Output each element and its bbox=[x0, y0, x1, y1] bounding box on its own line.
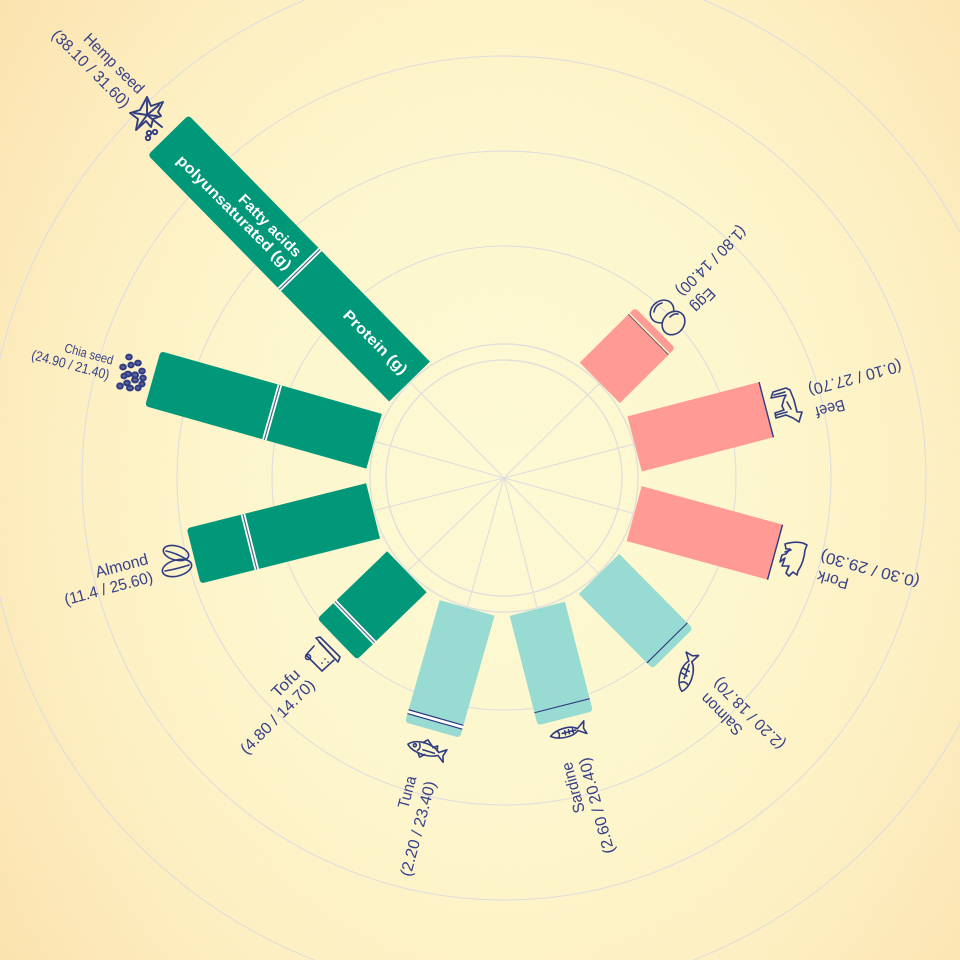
label: Chia seed: (24.90 / 21.40) bbox=[30, 346, 111, 383]
bar: Pork bbox=[627, 486, 783, 580]
bar: Egg bbox=[580, 308, 675, 403]
label: Sardine: Sardine bbox=[559, 760, 589, 815]
label: Beef: (0.10 / 27.70) bbox=[806, 357, 903, 398]
label: Sardine bbox=[559, 755, 618, 860]
bar: Beef bbox=[627, 382, 773, 472]
legend labels inside hemp bar bbox=[173, 141, 416, 384]
label: Chia seed: Chia seed bbox=[63, 340, 115, 368]
label: Pork: (0.30 / 29.30) bbox=[819, 547, 922, 590]
label: Almond bbox=[58, 551, 155, 609]
bar: Salmon bbox=[579, 554, 693, 669]
icon: almonds bbox=[160, 543, 194, 580]
label: Salmon: (2.20 / 18.70) bbox=[710, 674, 789, 752]
label: Egg: (1.80 / 14.00) bbox=[672, 222, 749, 299]
label: Tuna: (2.20 / 23.40) bbox=[398, 779, 440, 878]
label: Almond: (11.4 / 25.60) bbox=[63, 569, 155, 609]
bar: Chia seed bbox=[145, 351, 382, 469]
legend labels inside hemp bar: Fatty acids bbox=[235, 191, 305, 261]
label: Salmon: Salmon bbox=[698, 689, 747, 738]
label: Tofu: Tofu bbox=[269, 666, 304, 701]
icon: chia seeds bbox=[117, 355, 146, 390]
label: Hemp seed: (38.10 / 31.60) bbox=[48, 27, 133, 112]
bar: Hemp seed bbox=[148, 115, 430, 401]
icon: salmon fish bbox=[676, 652, 699, 693]
label: Egg bbox=[672, 222, 765, 315]
label: Sardine: (2.60 / 20.40) bbox=[576, 755, 618, 855]
icon: tofu pot bbox=[306, 637, 340, 671]
label: Almond: Almond bbox=[94, 551, 150, 582]
label: Tuna bbox=[379, 774, 440, 878]
radial bar chart bbox=[145, 115, 783, 738]
icon: tuna fish bbox=[405, 735, 448, 764]
label: Beef: Beef bbox=[813, 396, 847, 420]
label: Pork bbox=[813, 547, 922, 609]
legend labels inside hemp bar: polyunsaturated (g) bbox=[173, 152, 295, 274]
label: Egg: Egg bbox=[687, 284, 718, 315]
legend labels inside hemp bar: Protein (g) bbox=[339, 307, 411, 378]
icon: pig bbox=[780, 542, 807, 576]
label: Beef bbox=[806, 357, 909, 420]
label: Tuna: Tuna bbox=[395, 774, 420, 810]
label: Chia seed bbox=[30, 332, 115, 383]
bar: Almond bbox=[187, 483, 380, 584]
bar: Tofu bbox=[317, 551, 427, 660]
label: Hemp seed: Hemp seed bbox=[80, 30, 147, 98]
icon: eggs bbox=[646, 295, 690, 339]
label: Pork: Pork bbox=[814, 567, 851, 591]
label: Tofu: (4.80 / 14.70) bbox=[237, 677, 319, 758]
bar: Tuna bbox=[405, 600, 495, 738]
icon: sardine fish bbox=[549, 721, 587, 742]
icon: hemp leaf bbox=[130, 97, 163, 140]
bar: Sardine bbox=[510, 602, 593, 725]
icon: cow bbox=[771, 388, 802, 422]
